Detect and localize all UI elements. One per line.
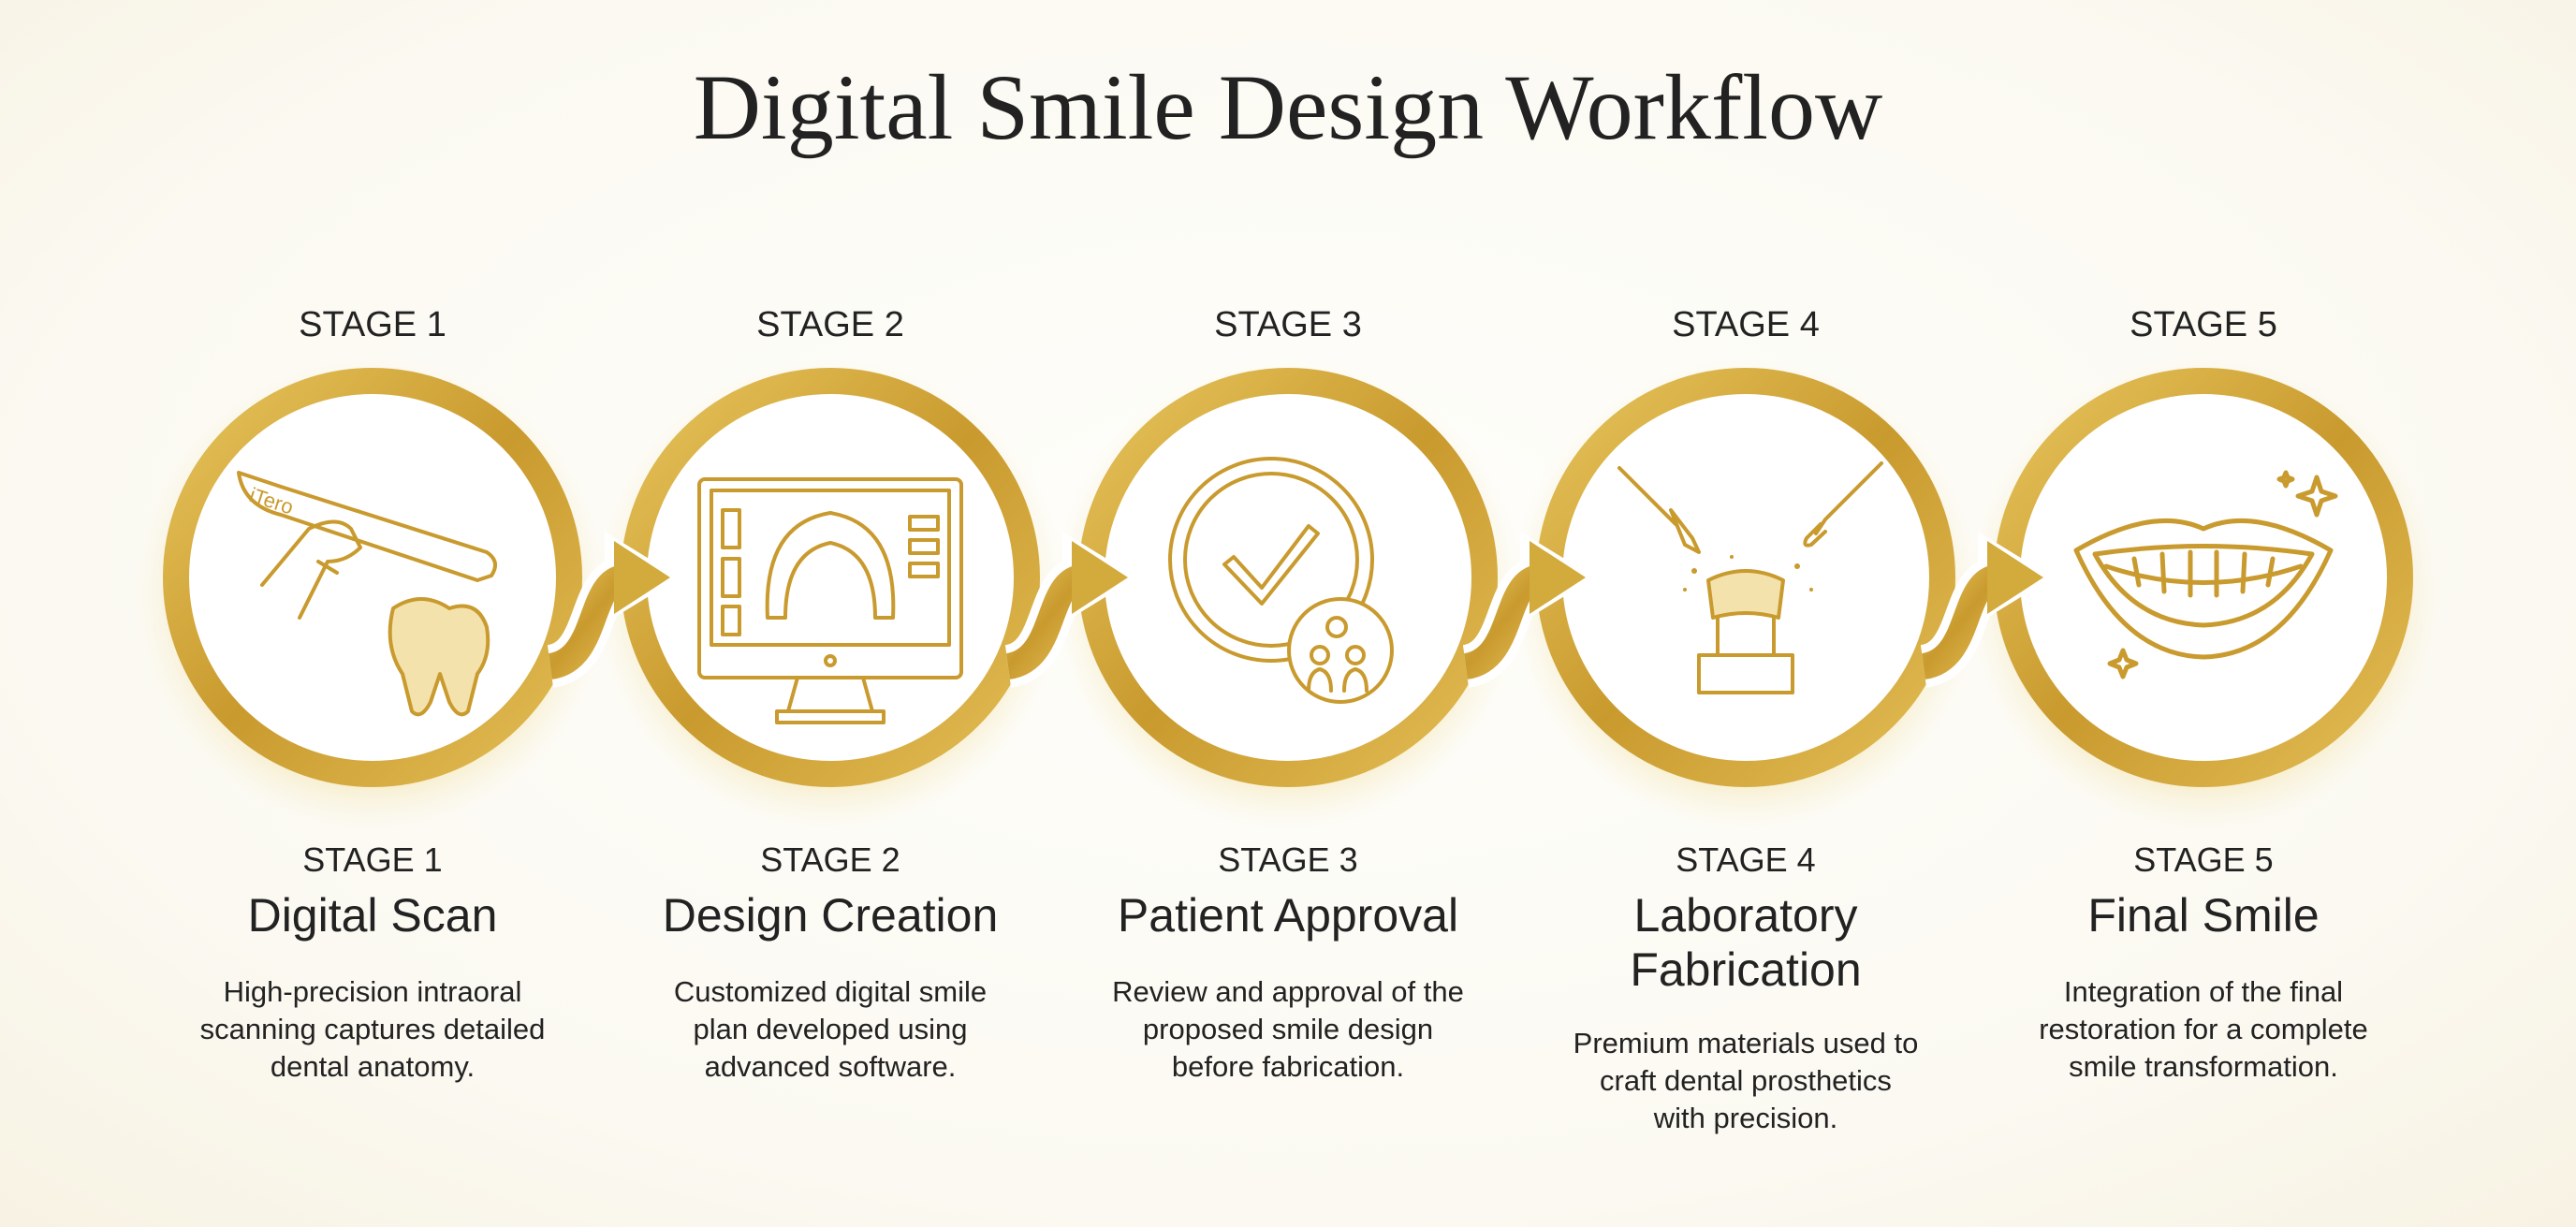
icon: intraoral scanner and tooth xyxy=(239,473,495,714)
stage 4 text: Premium materials used to xyxy=(1573,1027,1918,1059)
stage 2 text: STAGE 2 xyxy=(760,840,900,879)
stage 5 text: Final Smile xyxy=(2087,889,2320,942)
stage 3 text xyxy=(1112,840,1464,1083)
stage 4 text: Laboratory xyxy=(1633,889,1858,942)
top stage labels: STAGE 2 xyxy=(756,305,904,344)
stage 3 text: Patient Approval xyxy=(1118,889,1458,942)
icon: laboratory fabrication xyxy=(1619,463,1881,693)
stage 5 text: restoration for a complete xyxy=(2039,1013,2368,1045)
stage 5 text: smile transformation. xyxy=(2069,1050,2338,1083)
circles with rings xyxy=(137,358,2439,830)
icon: monitor with dental design xyxy=(699,479,961,723)
stage 1 text: Digital Scan xyxy=(248,889,497,942)
top stage labels: STAGE 3 xyxy=(1214,305,1362,344)
stage 3 text: Review and approval of the xyxy=(1112,975,1464,1008)
stage 5 text: STAGE 5 xyxy=(2133,840,2274,879)
stage 1 text: scanning captures detailed xyxy=(200,1013,545,1045)
stage 3 text: proposed smile design xyxy=(1143,1013,1433,1045)
stage 3 text: STAGE 3 xyxy=(1218,840,1358,879)
top stage labels: STAGE 4 xyxy=(1672,305,1820,344)
icon: intraoral scanner and tooth: iTero xyxy=(246,483,297,519)
stage 4 text: Fabrication xyxy=(1630,943,1862,996)
stage 4 text: STAGE 4 xyxy=(1676,840,1816,879)
stage 3 text: before fabrication. xyxy=(1172,1050,1404,1083)
stage 4 text xyxy=(1573,840,1918,1134)
top stage labels: STAGE 5 xyxy=(2130,305,2277,344)
stage 2 text xyxy=(663,840,998,1083)
stage 1 text xyxy=(200,840,545,1083)
stage 5 text xyxy=(2039,840,2368,1083)
stage 5 text: Integration of the final xyxy=(2064,975,2343,1008)
stage 2 text: Design Creation xyxy=(663,889,998,942)
stage 2 text: plan developed using xyxy=(693,1013,968,1045)
arrows between stages xyxy=(550,532,2053,666)
stage 1 text: dental anatomy. xyxy=(271,1050,475,1083)
top stage labels xyxy=(299,305,2277,344)
stage 4 text: with precision. xyxy=(1653,1102,1837,1134)
icon: checkmark approval with people xyxy=(1170,459,1392,702)
stage 2 text: advanced software. xyxy=(705,1050,956,1083)
icon: final smile xyxy=(2076,473,2335,677)
stage 2 text: Customized digital smile xyxy=(674,975,987,1008)
stage 4 text: craft dental prosthetics xyxy=(1600,1064,1892,1097)
title: Digital Smile Design Workflow xyxy=(694,55,1882,159)
top stage labels: STAGE 1 xyxy=(299,305,446,344)
stage 1 text: STAGE 1 xyxy=(302,840,443,879)
stage 1 text: High-precision intraoral xyxy=(224,975,521,1008)
